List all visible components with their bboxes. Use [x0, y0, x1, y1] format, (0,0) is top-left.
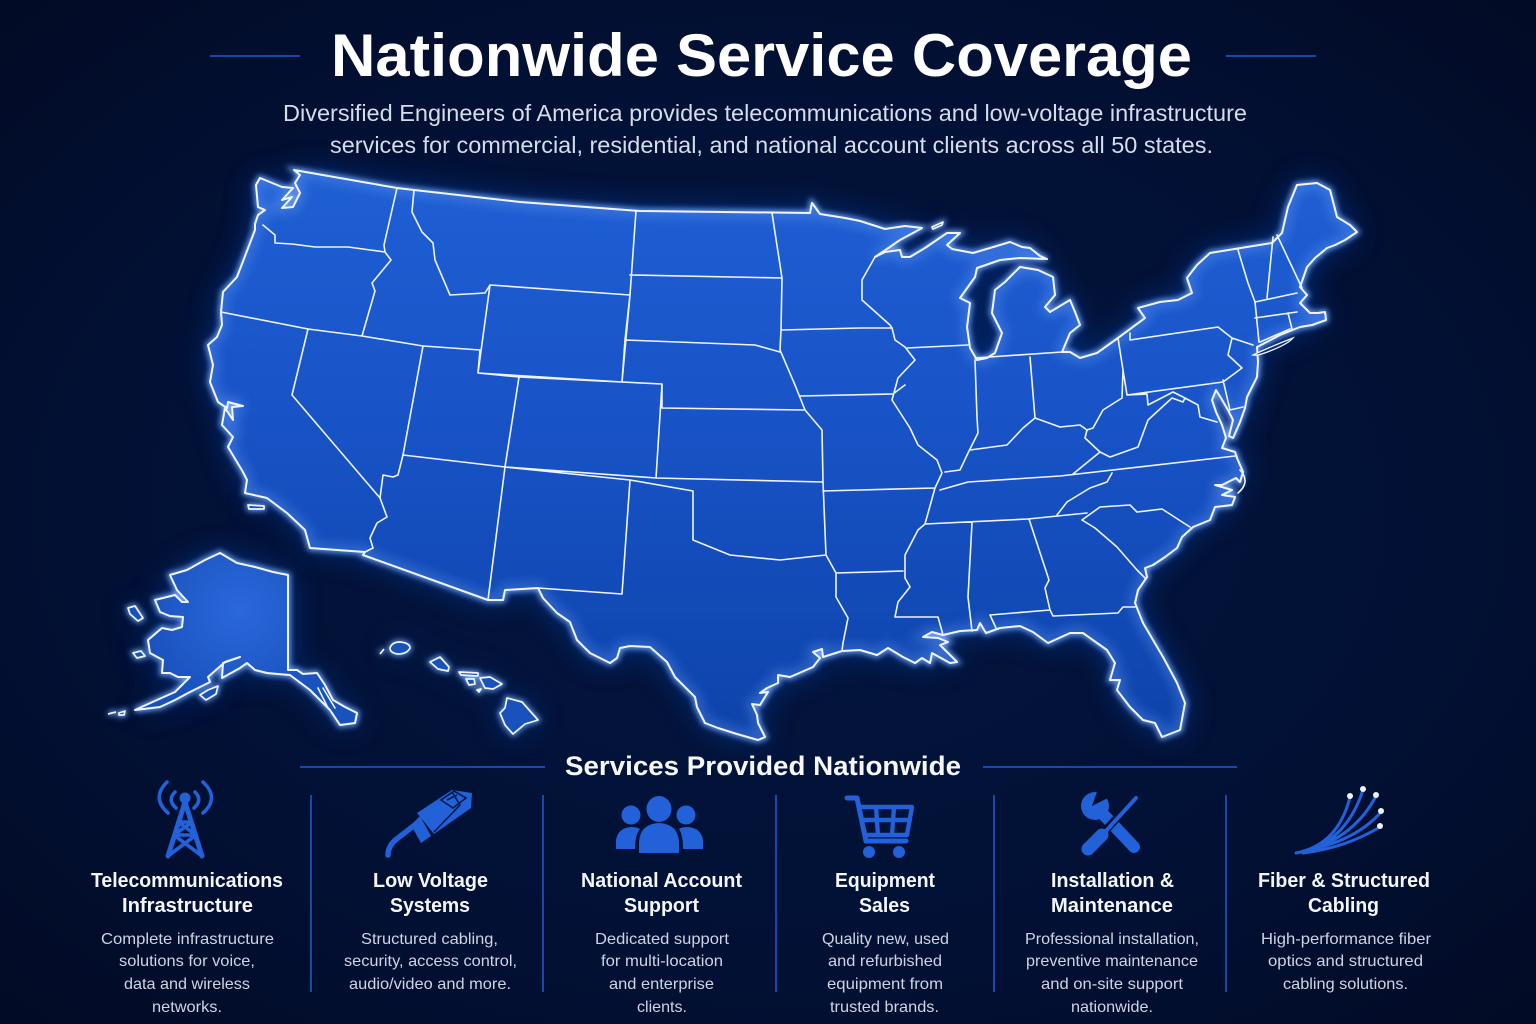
heading: Fiber & Structured [1258, 870, 1430, 892]
heading: Low Voltage [373, 870, 488, 892]
service: installation and maintenance [1025, 789, 1199, 1016]
icon: fiber optic strands [1296, 786, 1384, 853]
description: Dedicated support [595, 931, 730, 948]
heading: Infrastructure [122, 895, 253, 917]
description: networks. [152, 999, 222, 1016]
description: and on-site support [1041, 976, 1184, 993]
heading: Installation & [1051, 870, 1174, 892]
contiguous states [208, 170, 1357, 740]
heading [1258, 870, 1430, 917]
Hawaii and islands [108, 222, 943, 734]
description: equipment from [827, 976, 943, 993]
service: fiber and structured cabling [1258, 786, 1432, 993]
heading: Systems [390, 895, 470, 917]
description [1261, 931, 1432, 993]
heading: Cabling [1308, 895, 1379, 917]
description: solutions for voice, [119, 953, 255, 970]
heading: National Account [581, 870, 742, 892]
heading: Maintenance [1051, 895, 1173, 917]
Alaska [135, 553, 357, 725]
description [101, 931, 274, 1016]
description: and refurbished [828, 953, 942, 970]
heading [1051, 870, 1174, 917]
map of the United States [108, 170, 1357, 740]
icon: shopping cart [847, 798, 912, 858]
heading [835, 870, 935, 917]
description: Quality new, used [822, 931, 949, 948]
icon: group of people [616, 796, 703, 853]
description: Complete infrastructure [101, 931, 274, 948]
description [595, 931, 730, 1016]
heading: Sales [859, 895, 910, 917]
description [344, 931, 517, 993]
title: Nationwide Service Coverage [331, 22, 1192, 89]
subtitle: services for commercial, residential, and national account clients across all 50 states. [330, 132, 1213, 158]
description: for multi-location [601, 953, 723, 970]
service: low voltage systems [344, 790, 517, 993]
description: preventive maintenance [1026, 953, 1198, 970]
heading: Support [624, 895, 699, 917]
description: data and wireless [124, 976, 250, 993]
description: High-performance fiber [1261, 931, 1432, 948]
icon: radio tower [159, 782, 212, 856]
description: Structured cabling, [361, 931, 498, 948]
description: security, access control, [344, 953, 517, 970]
description [822, 931, 949, 1016]
description: trusted brands. [830, 999, 939, 1016]
heading: Telecommunications [91, 870, 283, 892]
icon: ethernet plug [388, 790, 472, 855]
heading [373, 870, 488, 917]
description: optics and structured [1268, 953, 1423, 970]
service: telecommunications infrastructure [91, 782, 283, 1016]
services heading: Services Provided Nationwide [565, 751, 961, 781]
title rule left [210, 55, 300, 57]
description: audio/video and more. [349, 976, 511, 993]
subtitle [283, 100, 1247, 158]
heading [581, 870, 742, 917]
description: and enterprise [609, 976, 714, 993]
description [1025, 931, 1199, 1016]
subtitle: Diversified Engineers of America provides telecommunications and low-voltage infrastructure [283, 100, 1247, 126]
service: national account support [581, 796, 742, 1016]
title rule right [1226, 55, 1316, 57]
heading: Equipment [835, 870, 935, 892]
service: equipment sales [822, 798, 949, 1016]
description: Professional installation, [1025, 931, 1199, 948]
icon: wrench and screwdriver [1081, 789, 1136, 849]
heading [91, 870, 283, 917]
description: cabling solutions. [1283, 976, 1408, 993]
description: nationwide. [1071, 999, 1153, 1016]
column dividers [311, 795, 1226, 992]
description: clients. [637, 999, 687, 1016]
